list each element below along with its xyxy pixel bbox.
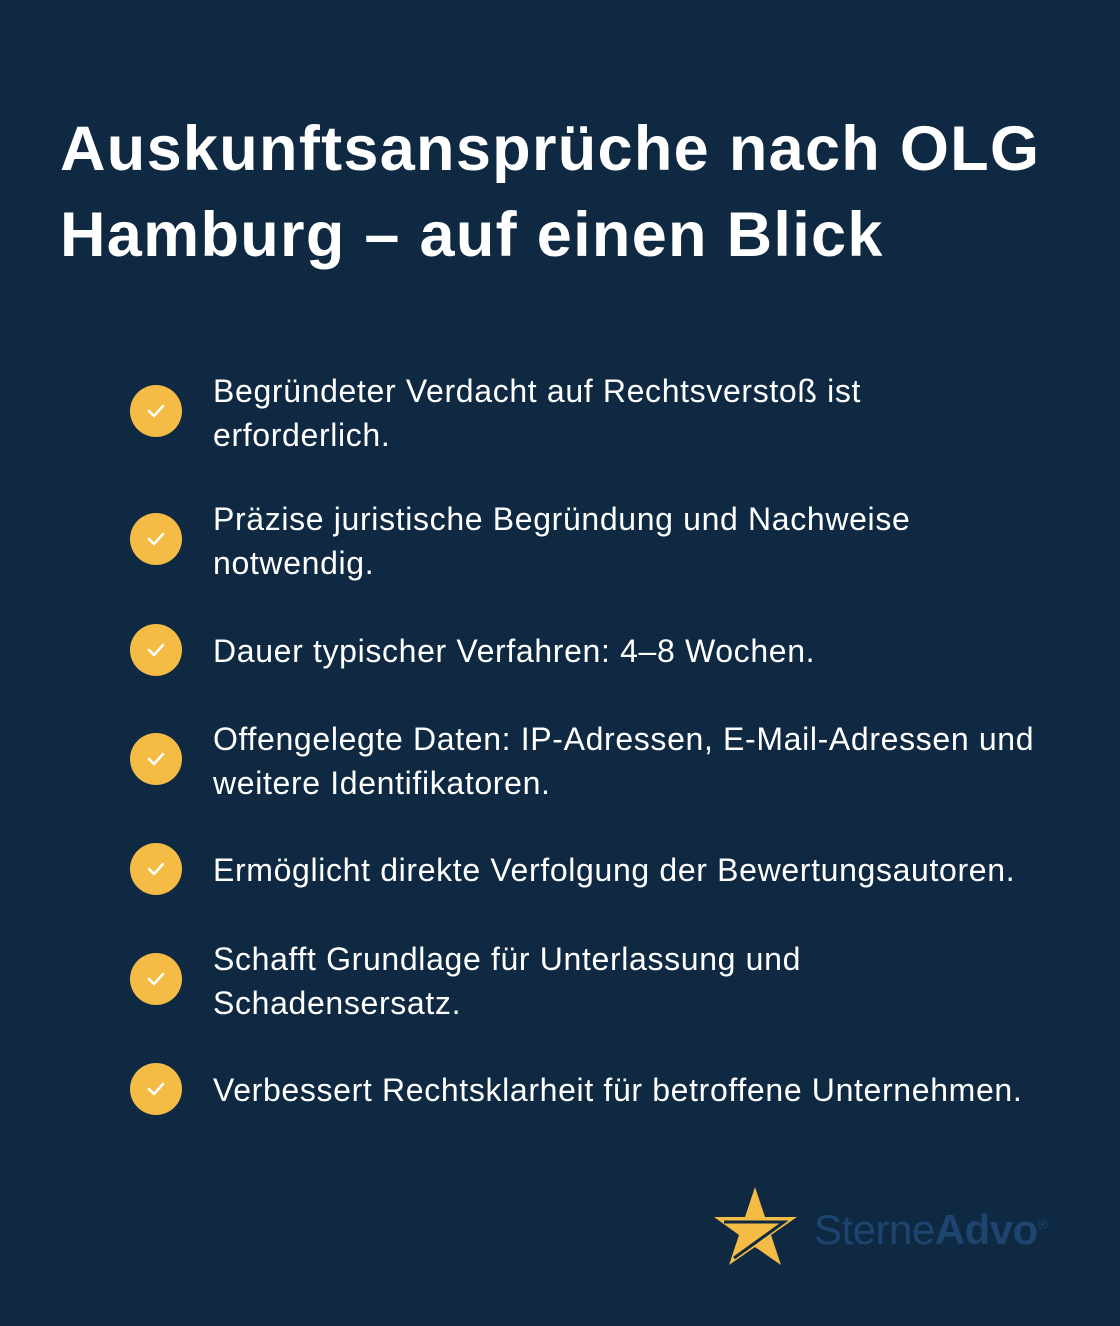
item 6 <box>130 941 801 1021</box>
text: Schadensersatz. <box>213 985 461 1021</box>
text: Offengelegte Daten: IP-Adressen, E-Mail-Adressen und <box>213 721 1034 757</box>
text: Begründeter Verdacht auf Rechtsverstoß ist <box>213 373 861 409</box>
text <box>213 373 861 453</box>
item 1 <box>130 373 861 453</box>
text: Verbessert Rechtsklarheit für betroffene Unternehmen. <box>213 1072 1022 1108</box>
item 4 <box>130 721 1034 801</box>
text: erforderlich. <box>213 417 390 453</box>
text: weitere Identifikatoren. <box>213 765 551 801</box>
icon: check <box>130 624 182 676</box>
icon: star <box>714 1187 797 1265</box>
icon: check <box>130 953 182 1005</box>
title: Hamburg – auf einen Blick <box>60 200 884 270</box>
item 5 <box>130 843 1015 895</box>
text: Ermöglicht direkte Verfolgung der Bewertungsautoren. <box>213 852 1015 888</box>
icon: check <box>130 1063 182 1115</box>
title: Auskunftsansprüche nach OLG <box>60 114 1040 184</box>
item 2 <box>130 501 910 581</box>
item 3 <box>130 624 815 676</box>
logo text: SterneAdvo® <box>814 1206 1048 1253</box>
text <box>213 721 1034 801</box>
icon: check <box>130 385 182 437</box>
text <box>213 501 910 581</box>
title <box>60 114 1040 270</box>
item 7 <box>130 1063 1022 1115</box>
icon: check <box>130 513 182 565</box>
text: Präzise juristische Begründung und Nachweise <box>213 501 910 537</box>
logo <box>714 1187 1048 1265</box>
text <box>213 941 801 1021</box>
text: Dauer typischer Verfahren: 4–8 Wochen. <box>213 633 815 669</box>
icon: check <box>130 843 182 895</box>
text: Schafft Grundlage für Unterlassung und <box>213 941 801 977</box>
icon: check <box>130 733 182 785</box>
text: notwendig. <box>213 545 374 581</box>
